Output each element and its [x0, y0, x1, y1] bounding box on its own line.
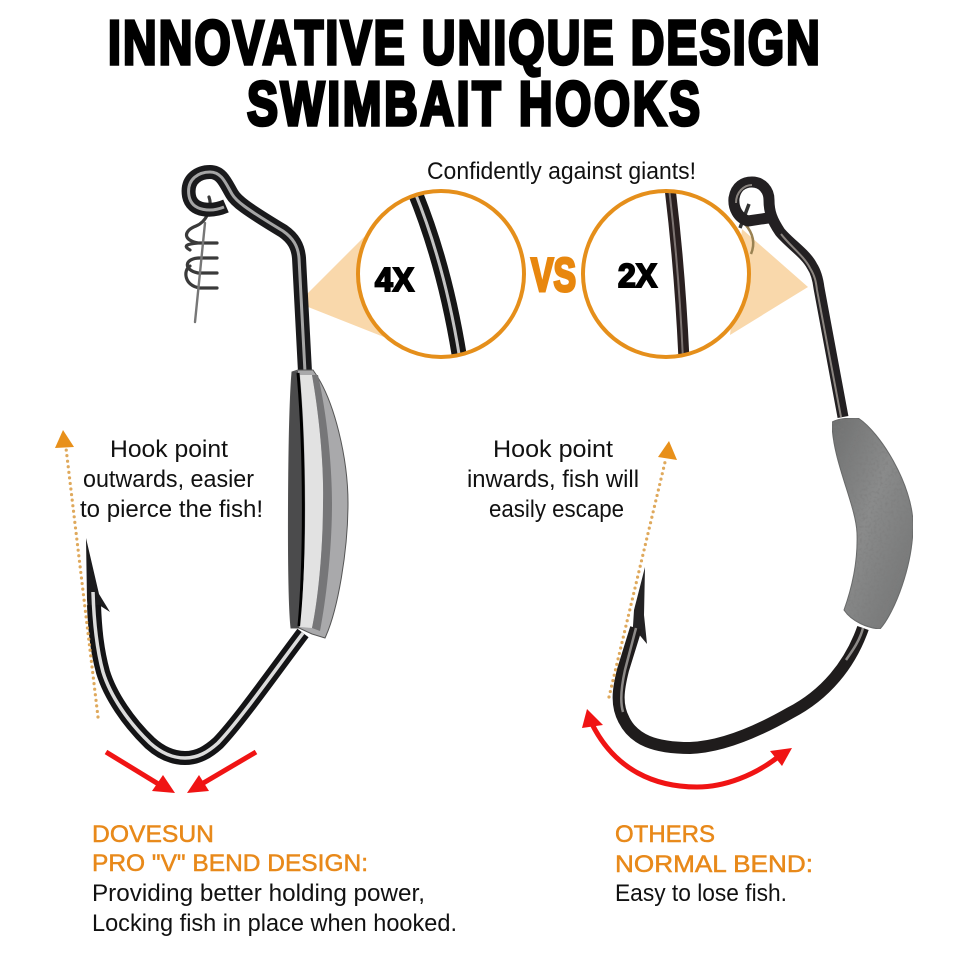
right sinker weight	[832, 418, 913, 629]
right hook: normal bend and point	[619, 567, 863, 748]
VS label: VS	[531, 248, 576, 301]
left hook-point note: outwards, easier	[83, 466, 254, 493]
left hook-point note: to pierce the fish!	[80, 496, 263, 523]
right caption: Easy to lose fish.	[615, 880, 787, 907]
right hook-point note: easily escape	[489, 496, 624, 523]
title: SWIMBAIT HOOKS	[247, 68, 700, 139]
left hook: 4X wire	[186, 172, 305, 372]
4X magnifier circle	[358, 190, 524, 360]
title	[108, 7, 820, 139]
red arrows: V bend	[106, 752, 256, 793]
wire and eye	[189, 172, 305, 372]
right caption	[615, 821, 813, 907]
right magnifier cone	[730, 229, 808, 335]
tagline: Confidently against giants!	[427, 158, 696, 185]
left sinker weight	[288, 370, 348, 638]
left hook-point note: Hook point	[110, 436, 228, 463]
left magnifier cone	[298, 236, 384, 337]
screw spring	[186, 197, 217, 322]
4X label: 4X	[375, 261, 414, 298]
right dotted direction arrow	[609, 441, 677, 697]
right hook: upper wire and eye	[734, 182, 843, 417]
left caption: PRO "V" BEND DESIGN:	[92, 850, 368, 877]
right hook-point note: inwards, fish will	[467, 466, 639, 493]
right hook-point note	[467, 436, 639, 523]
2X label: 2X	[618, 257, 657, 294]
right caption: OTHERS	[615, 821, 715, 848]
left hook-point note	[80, 436, 263, 523]
left caption: Locking fish in place when hooked.	[92, 910, 457, 937]
red arrow: normal bend arc	[582, 709, 792, 787]
left hook: V bend and point	[86, 538, 303, 758]
left caption: DOVESUN	[92, 821, 214, 848]
2X magnifier circle	[583, 188, 749, 360]
title: INNOVATIVE UNIQUE DESIGN	[108, 7, 820, 78]
left caption	[92, 821, 457, 937]
right hook-point note: Hook point	[493, 436, 613, 463]
left caption: Providing better holding power,	[92, 880, 425, 907]
right caption: NORMAL BEND:	[615, 851, 813, 878]
left dotted direction arrow	[55, 430, 98, 717]
